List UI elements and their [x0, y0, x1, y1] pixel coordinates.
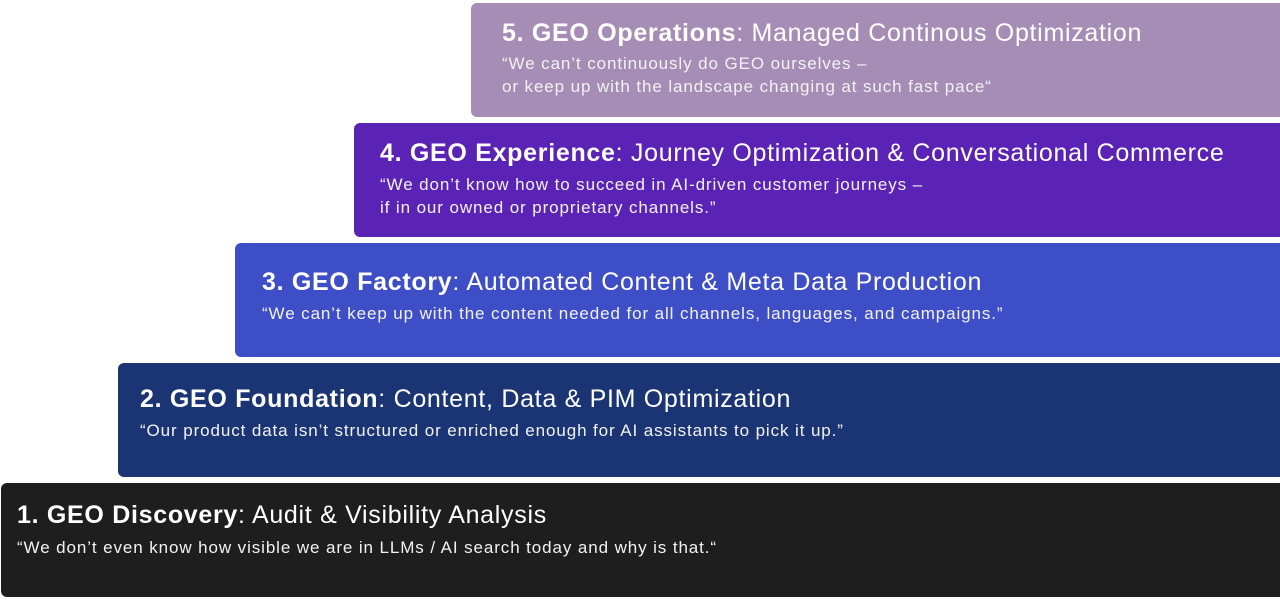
heading: step 3: 3. GEO Factory: Automated Content & Meta Data Production	[262, 268, 982, 296]
quote: step 5: or keep up with the landscape changing at such fast pace“	[502, 77, 992, 96]
quote: step 2: “Our product data isn’t structured or enriched enough for AI assistants to pick it up.”	[140, 421, 844, 440]
quote: step 3: “We can’t keep up with the content needed for all channels, languages, and campaigns.”	[262, 304, 1003, 323]
quote: step 4: if in our owned or proprietary channels.”	[380, 198, 716, 217]
quote: step 1: “We don’t even know how visible we are in LLMs / AI search today and why is that.“	[17, 538, 717, 557]
heading: step 2: 2. GEO Foundation: Content, Data & PIM Optimization	[140, 385, 791, 413]
panel: step 4 GEO Experience	[354, 123, 1280, 237]
panel: step 1 GEO Discovery	[1, 483, 1280, 597]
panel: step 2 GEO Foundation	[118, 363, 1280, 477]
quote: step 4	[380, 175, 923, 217]
quote: step 5: “We can’t continuously do GEO ourselves –	[502, 54, 867, 73]
heading: step 4: 4. GEO Experience: Journey Optimization & Conversational Commerce	[380, 139, 1224, 167]
quote: step 5	[502, 54, 992, 96]
panel: step 3 GEO Factory	[235, 243, 1280, 357]
heading: step 5: 5. GEO Operations: Managed Continous Optimization	[502, 19, 1142, 47]
heading: step 1: 1. GEO Discovery: Audit & Visibility Analysis	[17, 501, 547, 529]
panel: step 5 GEO Operations	[471, 3, 1280, 117]
quote: step 4: “We don’t know how to succeed in AI-driven customer journeys –	[380, 175, 923, 194]
